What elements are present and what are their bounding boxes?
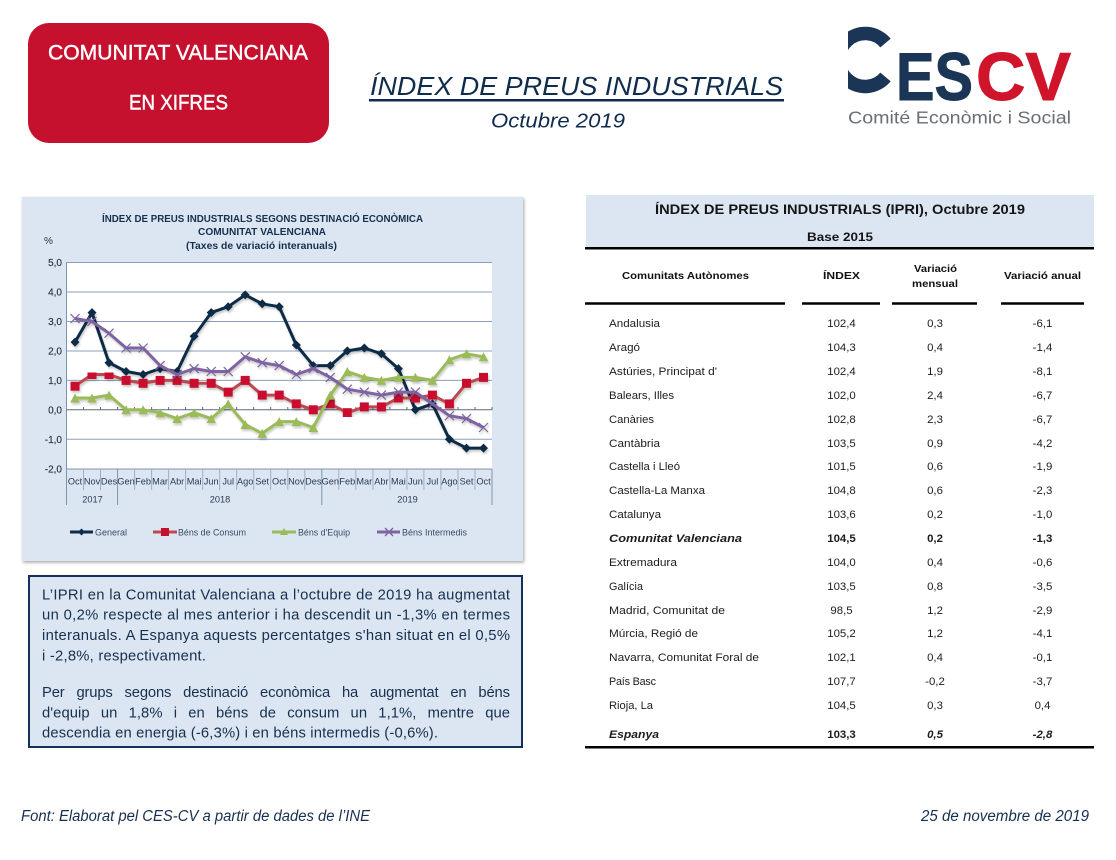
table rows: Catalunya bbox=[609, 509, 661, 521]
table rows: -6,1 bbox=[1033, 318, 1052, 330]
table rows: 103,6 bbox=[827, 509, 856, 521]
logo: CESCV: CV bbox=[976, 39, 1071, 115]
table column headers bbox=[585, 263, 1084, 304]
x axis labels: Mar bbox=[152, 476, 168, 486]
x axis labels: Nov bbox=[288, 476, 305, 486]
table rows: Andalusia bbox=[609, 318, 660, 330]
table column headers: Variació anual bbox=[1004, 270, 1081, 282]
table rows: 0,2 bbox=[927, 509, 943, 521]
table column headers: ÍNDEX bbox=[823, 269, 860, 282]
y axis labels: 0,0 bbox=[48, 406, 62, 416]
table rows: 102,4 bbox=[827, 318, 856, 330]
table rows: 0,2 bbox=[927, 533, 943, 545]
table rows: -4,1 bbox=[1033, 628, 1052, 640]
table rows: 101,5 bbox=[827, 461, 856, 473]
table rows: 102,4 bbox=[827, 366, 856, 378]
x axis labels: Mar bbox=[356, 476, 372, 486]
table rows: 104,3 bbox=[827, 342, 856, 354]
x axis labels: Gen bbox=[117, 476, 135, 486]
text block: commentary: d'equip un 1,8% i en béns de consum un 1,1%, mentre que bbox=[42, 705, 510, 721]
table rows: Espanya bbox=[609, 729, 659, 741]
table rows: -1,9 bbox=[1033, 461, 1052, 473]
x axis labels: Jun bbox=[204, 476, 219, 486]
table rows: 104,0 bbox=[827, 557, 856, 569]
table heading band: ÍNDEX DE PREUS INDUSTRIALS (IPRI), Octubre 2019 bbox=[655, 202, 1025, 217]
x axis labels: Feb bbox=[339, 476, 355, 486]
table rows: Extremadura bbox=[609, 557, 677, 569]
logo: CESCV bbox=[839, 33, 1071, 127]
table rows: -1,4 bbox=[1033, 342, 1052, 354]
legend: Béns Intermedis bbox=[402, 528, 467, 538]
table rows: -1,0 bbox=[1033, 509, 1052, 521]
table rows: -6,7 bbox=[1033, 414, 1052, 426]
table rows: 0,4 bbox=[927, 342, 943, 354]
line: Béns Intermedis bbox=[75, 318, 484, 428]
title: Octubre 2019 bbox=[491, 110, 625, 132]
table rows: -0,1 bbox=[1033, 652, 1052, 664]
table rows: 2,3 bbox=[927, 414, 943, 426]
table rows: -1,3 bbox=[1033, 533, 1052, 545]
table rows: Astúries, Principat d' bbox=[609, 366, 717, 378]
footer: date: 25 de novembre de 2019 bbox=[920, 808, 1089, 825]
x axis labels: 2019 bbox=[397, 494, 418, 504]
table rows: 0,4 bbox=[927, 652, 943, 664]
table column headers: mensual bbox=[912, 278, 958, 290]
x axis labels: Des bbox=[305, 476, 322, 486]
x axis labels: Nov bbox=[84, 476, 101, 486]
y axis labels: -1,0 bbox=[45, 435, 62, 446]
text block: commentary: Per grups segons destinació econòmica ha augmentat en béns bbox=[42, 685, 510, 701]
x axis labels: Abr bbox=[170, 476, 184, 486]
x axis labels: Mai bbox=[391, 476, 406, 486]
table rows: Navarra, Comunitat Foral de bbox=[609, 652, 759, 664]
line: Béns de Consum bbox=[75, 374, 484, 413]
x axis labels: Set bbox=[460, 476, 474, 486]
y axis labels: 3,0 bbox=[48, 317, 62, 328]
chart title: COMUNITAT VALENCIANA bbox=[198, 227, 326, 238]
title: ÍNDEX DE PREUS INDUSTRIALS bbox=[370, 71, 784, 101]
table rows: -3,5 bbox=[1033, 581, 1052, 593]
legend: Béns d'Equip bbox=[298, 528, 350, 538]
table rows: 104,8 bbox=[827, 485, 856, 497]
table rows: 103,3 bbox=[827, 729, 856, 741]
table rows: Rioja, La bbox=[609, 700, 653, 712]
table rows: -2,3 bbox=[1033, 485, 1052, 497]
table rows: Cantàbria bbox=[609, 438, 660, 450]
table rows: 0,8 bbox=[927, 581, 943, 593]
table rows: 1,2 bbox=[927, 605, 943, 617]
chart title: ÍNDEX DE PREUS INDUSTRIALS SEGONS DESTINACIÓ ECONÒMICA bbox=[102, 212, 423, 225]
line: Béns d'Equip bbox=[75, 354, 484, 433]
table rows: Múrcia, Regió de bbox=[609, 628, 698, 640]
table rows: 0,6 bbox=[927, 485, 943, 497]
table column headers: Comunitats Autònomes bbox=[622, 270, 749, 282]
table rows: 104,5 bbox=[827, 533, 856, 545]
x axis labels: Ago bbox=[237, 476, 253, 486]
table rows: 0,9 bbox=[927, 438, 943, 450]
text block: commentary: interanuals. A Espanya aquests percentatges s'han situat en el 0,5% bbox=[42, 628, 510, 644]
table rows: 102,1 bbox=[827, 652, 856, 664]
table rows: -0,6 bbox=[1033, 557, 1052, 569]
table rows: Castella-La Manxa bbox=[609, 485, 705, 497]
text block: commentary: un 0,2% respecte al mes anterior i ha descendit un -1,3% en termes bbox=[42, 608, 510, 624]
table rows: Madrid, Comunitat de bbox=[609, 605, 725, 617]
table rows: 104,5 bbox=[827, 700, 856, 712]
y axis labels bbox=[44, 236, 62, 476]
x axis labels: Set bbox=[255, 476, 270, 486]
x axis labels: Jul bbox=[222, 476, 234, 486]
legend: Béns de Consum bbox=[178, 528, 246, 538]
table rows: -3,7 bbox=[1033, 676, 1052, 688]
x axis labels: Oct bbox=[68, 476, 83, 486]
text block: commentary: i -2,8%, respectivament. bbox=[42, 649, 206, 665]
table rows: -8,1 bbox=[1033, 366, 1052, 378]
chart title: (Taxes de variació interanuals) bbox=[186, 241, 337, 252]
table rows: 2,4 bbox=[927, 390, 943, 402]
table rows: 0,4 bbox=[1035, 700, 1050, 712]
table rows: Castella i Lleó bbox=[609, 461, 680, 473]
x axis labels: Feb bbox=[135, 476, 151, 486]
table rows: Canàries bbox=[609, 414, 655, 426]
x axis labels bbox=[68, 476, 491, 504]
table rows: 0,5 bbox=[927, 729, 944, 741]
legend bbox=[70, 528, 467, 538]
x axis labels: Oct bbox=[476, 476, 491, 486]
plot area with gridlines bbox=[66, 262, 492, 505]
table rows: 0,3 bbox=[927, 700, 943, 712]
table rows: 98,5 bbox=[830, 605, 853, 617]
table rows: Balears, Illes bbox=[609, 390, 675, 402]
table rows: 103,5 bbox=[827, 581, 856, 593]
table rows: -0,2 bbox=[925, 676, 945, 688]
x axis labels: 2018 bbox=[210, 494, 230, 504]
table rows: 102,0 bbox=[827, 390, 856, 402]
logo: CESCV: ES bbox=[896, 39, 973, 115]
y axis labels: % bbox=[44, 236, 53, 247]
table rows: 0,3 bbox=[927, 318, 943, 330]
table rows: Comunitat Valenciana bbox=[609, 533, 742, 545]
text block: commentary bbox=[29, 576, 522, 747]
table rows: 0,4 bbox=[927, 557, 943, 569]
panel: data table bbox=[585, 195, 1094, 748]
x axis labels: Abr bbox=[374, 476, 389, 486]
x axis labels: Ago bbox=[441, 476, 458, 486]
x axis labels: 2017 bbox=[82, 494, 103, 504]
x axis labels: Mai bbox=[187, 476, 202, 486]
table rows: -4,2 bbox=[1033, 438, 1052, 450]
table rows: -2,9 bbox=[1033, 605, 1052, 617]
y axis labels: 4,0 bbox=[48, 288, 62, 298]
table rows: 102,8 bbox=[827, 414, 856, 426]
table rows: -6,7 bbox=[1033, 390, 1052, 402]
x axis labels: Gen bbox=[322, 476, 339, 486]
footer: source: Font: Elaborat pel CES-CV a partir de dades de l’INE bbox=[21, 808, 371, 825]
y axis labels: 2,0 bbox=[48, 346, 62, 358]
table rows: 107,7 bbox=[827, 676, 856, 688]
table heading band: Base 2015 bbox=[807, 232, 874, 244]
text block: commentary: descendia en energia (-6,3%) i en béns intermedis (-0,6%). bbox=[42, 726, 438, 742]
title bbox=[369, 71, 784, 132]
table rows: 0,6 bbox=[927, 461, 943, 473]
x axis labels: Jul bbox=[427, 476, 438, 486]
x axis labels: Des bbox=[101, 476, 118, 486]
text block: commentary: L’IPRI en la Comunitat Valenciana a l’octubre de 2019 ha augmentat bbox=[42, 587, 510, 603]
header badge: Comunitat Valenciana en xifres bbox=[28, 23, 329, 143]
logo: CESCV: Comité Econòmic i Social bbox=[848, 108, 1071, 128]
table rows: País Basc bbox=[609, 676, 657, 688]
table rows: 105,2 bbox=[827, 628, 856, 640]
table column headers: Variació bbox=[914, 263, 957, 275]
table rows: -2,8 bbox=[1033, 729, 1053, 741]
y axis labels: 5,0 bbox=[48, 258, 62, 269]
panel: line chart bbox=[22, 197, 523, 561]
legend: General bbox=[95, 528, 127, 538]
x axis labels: Jun bbox=[408, 476, 423, 486]
x axis labels: Oct bbox=[272, 476, 287, 486]
chart title bbox=[102, 212, 423, 252]
header badge: Comunitat Valenciana en xifres: COMUNITAT VALENCIANA bbox=[48, 42, 308, 64]
table rows: 103,5 bbox=[827, 438, 856, 450]
y axis labels: -2,0 bbox=[45, 464, 62, 476]
y axis labels: 1,0 bbox=[48, 376, 62, 387]
table rows bbox=[585, 318, 1094, 748]
header badge: Comunitat Valenciana en xifres: EN XIFRES bbox=[129, 92, 228, 114]
table rows: Galícia bbox=[609, 581, 643, 593]
table rows: 1,2 bbox=[927, 628, 943, 640]
table heading band bbox=[585, 195, 1094, 250]
line: General bbox=[75, 295, 484, 448]
table rows: 1,9 bbox=[927, 366, 943, 378]
table rows: Aragó bbox=[609, 342, 640, 354]
